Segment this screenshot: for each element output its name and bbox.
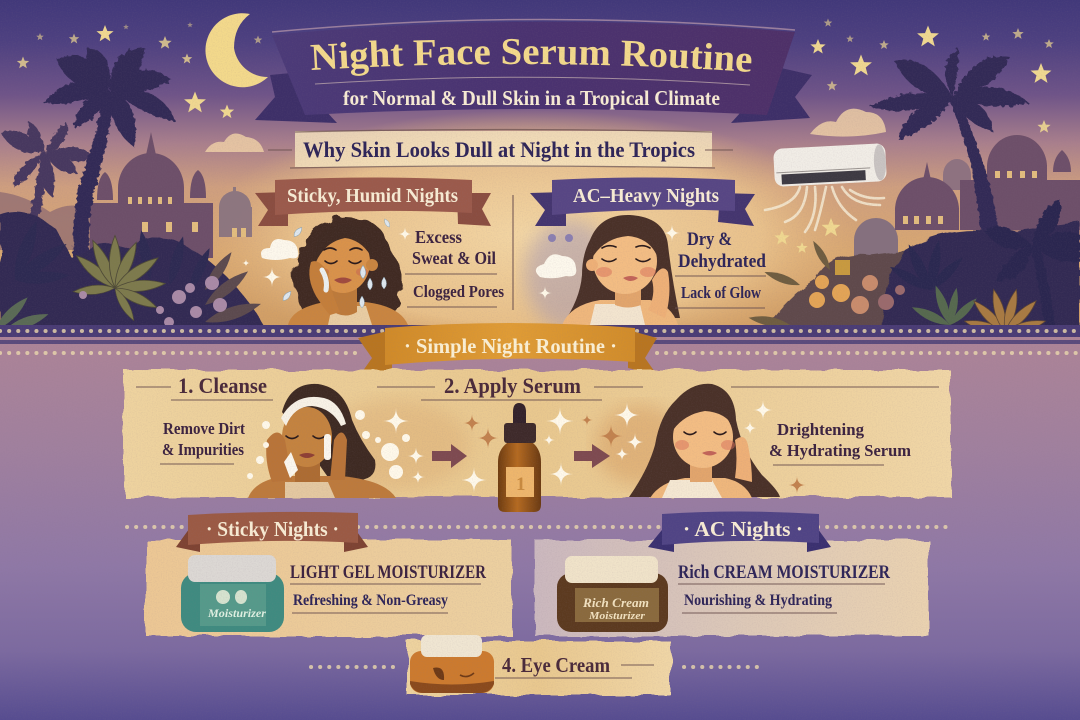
- section heading: why skin looks dull: [268, 130, 733, 168]
- section ribbon: simple night routine: · Simple Night Routine ·: [404, 334, 617, 358]
- text: light gel moisturizer: LIGHT GEL MOISTURIZER: [290, 562, 486, 583]
- title: Night Face Serum Routine: [310, 38, 752, 76]
- palm tree: small right: [985, 200, 1080, 330]
- heading: step 2 apply serum: [377, 373, 643, 400]
- foliage: left: [0, 212, 264, 335]
- sparkles: [242, 227, 412, 287]
- ribbon: ac-heavy nights: [530, 178, 755, 226]
- illustration: girl with dry skin: [562, 215, 680, 325]
- heading: step 2 apply serum: 2. Apply Serum: [444, 373, 581, 398]
- section heading: why skin looks dull: Why Skin Looks Dull at Night in the Tropics: [303, 137, 695, 162]
- panel: sticky nights moisturizer: [146, 512, 512, 636]
- tinted air behind girl: [525, 220, 615, 330]
- decorative band between sections: [0, 325, 1080, 353]
- paper panel: [407, 641, 671, 695]
- text: eye cream: 4. Eye Cream: [502, 653, 610, 677]
- panel: ac-heavy nights: [525, 178, 766, 330]
- illustration: girl glowing after serum: [629, 384, 780, 498]
- foliage: right: [748, 200, 1080, 336]
- text: dry and dehydrated: Dry &: [687, 229, 732, 250]
- stars: [17, 18, 1054, 253]
- title banner: [255, 18, 812, 123]
- palm tree: large left: [43, 48, 176, 258]
- bubbles and sparkles: [247, 400, 773, 493]
- banner body: [272, 22, 795, 115]
- arrow: [574, 444, 610, 468]
- icon: cloud: [261, 239, 298, 260]
- icon: cloud: [536, 254, 576, 278]
- text: dry and dehydrated: [678, 229, 766, 272]
- text: nourishing and hydrating: Nourishing & Hydrating: [684, 592, 832, 609]
- section ribbon: simple night routine: [358, 323, 657, 375]
- heading: step 1 cleanse: [136, 373, 273, 400]
- palace silhouette: left: [90, 132, 252, 258]
- clouds: [205, 109, 886, 152]
- text: brightening and hydrating serum: [769, 420, 911, 460]
- text: excess sweat and oil: [412, 227, 496, 268]
- icon: rich cream jar: Moisturizer: [588, 610, 646, 622]
- text: rich cream moisturizer: Rich CREAM MOISTURIZER: [678, 562, 890, 583]
- text: remove dirt: & Impurities: [162, 440, 244, 459]
- panel: steps 1 and 2: [124, 370, 951, 512]
- icon: rich cream jar: [557, 556, 668, 632]
- palm tree: large right: [870, 48, 1029, 240]
- text: dry and dehydrated: Dehydrated: [678, 251, 766, 272]
- panel: sticky humid nights: [242, 178, 504, 325]
- illustration: girl sweating: [281, 217, 408, 325]
- subtitle: for Normal & Dull Skin in a Tropical Climate: [343, 86, 720, 110]
- ribbon: sticky humid nights: Sticky, Humid Nights: [287, 185, 458, 207]
- icon: serum bottle: [498, 403, 541, 512]
- icon: eye cream jar: [410, 635, 494, 693]
- text: refreshing and non-greasy: Refreshing & Non-Greasy: [293, 592, 448, 609]
- icon: gel jar: [181, 555, 284, 632]
- icon: air conditioner: [765, 143, 887, 232]
- ribbon: sticky nights: · Sticky Nights ·: [206, 517, 339, 541]
- ribbon: ac nights: [648, 512, 831, 552]
- ribbon: sticky humid nights: [255, 178, 491, 226]
- sparkles: [538, 224, 680, 300]
- dotted divider: [127, 525, 947, 529]
- ac body: [773, 143, 887, 187]
- text: brightening and hydrating serum: Drightening: [777, 420, 864, 439]
- divider: [512, 195, 514, 310]
- cold air streams: [765, 187, 884, 232]
- icon: rich cream jar: Rich Cream: [582, 595, 649, 610]
- text: brightening and hydrating serum: & Hydrating Serum: [769, 441, 911, 460]
- paper panel: [124, 370, 951, 497]
- heading: step 1 cleanse: 1. Cleanse: [178, 373, 267, 398]
- palace silhouette: right: [854, 135, 1080, 270]
- distant hazy hills: [0, 192, 1080, 260]
- text: clogged pores: Clogged Pores: [413, 282, 504, 301]
- palm tree: small left: [0, 122, 95, 225]
- paper panel: [146, 540, 512, 636]
- illustration: girl cleansing: [248, 384, 396, 498]
- panel: eye cream: [311, 635, 764, 695]
- text: remove dirt: Remove Dirt: [163, 419, 245, 438]
- icon: serum bottle: 1: [516, 474, 526, 495]
- ribbon: ac nights: · AC Nights ·: [683, 517, 803, 541]
- text: excess sweat and oil: Sweat & Oil: [412, 248, 496, 268]
- icon: crescent moon: [205, 13, 268, 87]
- panel: ac nights moisturizer: [535, 512, 929, 636]
- arrow: [432, 444, 467, 468]
- ribbon: sticky nights: [176, 512, 368, 552]
- text: excess sweat and oil: Excess: [415, 227, 462, 247]
- text: remove dirt: [162, 419, 245, 459]
- paper panel: [535, 540, 929, 636]
- ribbon: ac-heavy nights: AC–Heavy Nights: [573, 185, 719, 207]
- banner tails: [255, 68, 812, 123]
- text: lack of glow: Lack of Glow: [681, 283, 762, 302]
- icon: gel jar: Moisturizer: [207, 606, 266, 620]
